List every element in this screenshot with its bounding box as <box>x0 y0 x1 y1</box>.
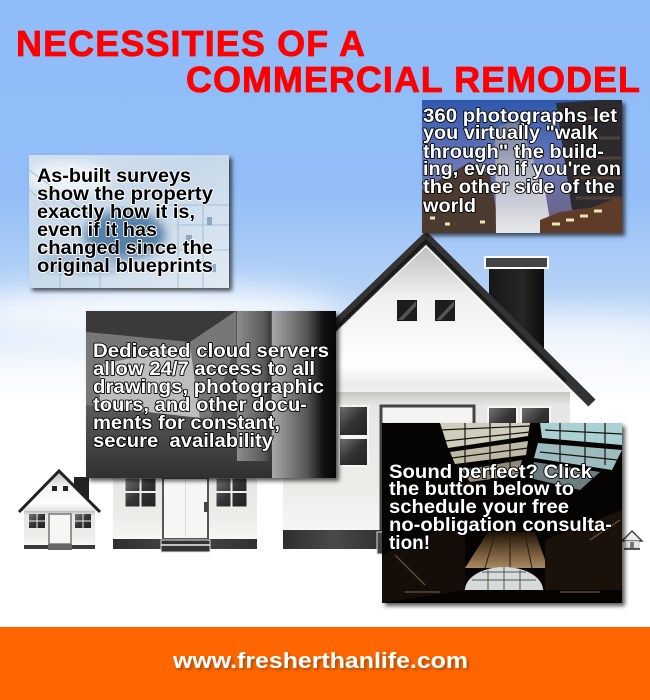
text: 360 photographs: you virtually "walk <box>423 122 598 144</box>
icon: large house <box>261 238 592 554</box>
text: sound perfect: Sound perfect? Click <box>389 461 592 483</box>
text: dedicated cloud servers <box>93 340 329 452</box>
text: dedicated cloud servers: secure availability <box>93 430 273 452</box>
text: sound perfect <box>389 461 612 554</box>
icon: middle house <box>113 470 257 552</box>
title: NECESSITIES OF A <box>16 23 365 64</box>
text: as-built surveys: show the property <box>37 183 213 205</box>
corridor photo <box>86 311 336 478</box>
text: sound perfect: schedule your free <box>389 496 569 518</box>
text: 360 photographs: world <box>422 195 476 217</box>
text: dedicated cloud servers: allow 24/7 access to all <box>93 358 315 380</box>
icon: small house, left <box>19 471 100 550</box>
text: 360 photographs: the other side of the <box>423 176 615 198</box>
text: 360 photographs: through" the build- <box>423 141 604 163</box>
text: as-built surveys: original blueprints <box>37 255 213 277</box>
station roof photo <box>382 423 622 603</box>
text: dedicated cloud servers: Dedicated cloud servers <box>93 340 329 362</box>
text: sound perfect: the button below to <box>389 478 574 500</box>
icon: tiny house, right <box>622 531 642 550</box>
text: as-built surveys: changed since the <box>37 237 213 259</box>
blueprint photo <box>28 155 229 288</box>
panel: dedicated cloud servers <box>86 311 336 478</box>
panel: 360 photographs <box>422 100 622 233</box>
text: 360 photographs: 360 photographs let <box>423 105 618 127</box>
footer bar <box>0 627 650 700</box>
skyscraper photo <box>422 100 622 233</box>
text: as-built surveys: even if it has <box>37 219 157 241</box>
text: dedicated cloud servers: ments for constant, <box>93 412 280 434</box>
text: sound perfect: tion! <box>389 532 430 554</box>
text: dedicated cloud servers: tours, and other docu- <box>93 394 307 416</box>
text: 360 photographs <box>422 105 621 217</box>
footer url: www.fresherthanlife.com <box>172 648 468 673</box>
title <box>16 23 640 100</box>
text: as-built surveys: As-built surveys <box>37 165 191 187</box>
panel: as-built surveys <box>28 155 229 288</box>
text: 360 photographs: ing, even if you're on <box>423 158 621 180</box>
text: as-built surveys <box>37 165 213 277</box>
panel: sound perfect <box>382 423 622 603</box>
text: dedicated cloud servers: drawings, photographic <box>93 376 324 398</box>
text: sound perfect: no-obligation consulta- <box>389 514 612 536</box>
text: as-built surveys: exactly how it is, <box>37 201 195 223</box>
title: COMMERCIAL REMODEL <box>186 59 640 100</box>
